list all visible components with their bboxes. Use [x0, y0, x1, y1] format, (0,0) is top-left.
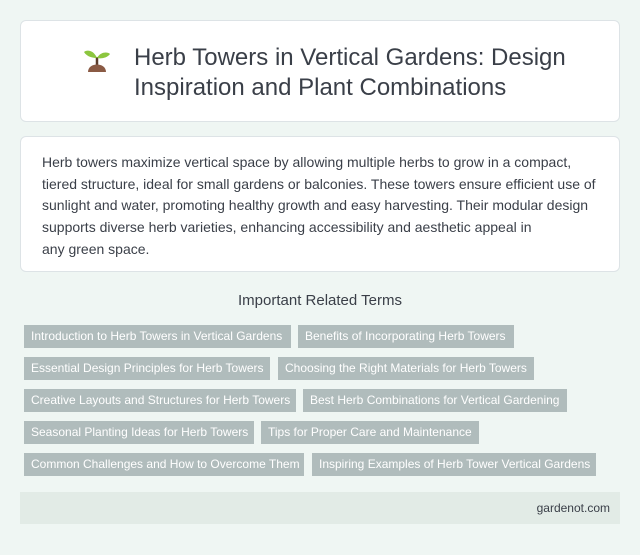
tags: Choosing the Right Materials for Herb Towers: [285, 361, 527, 375]
tags: Introduction to Herb Towers in Vertical Gardens: [31, 329, 282, 343]
tags: Essential Design Principles for Herb Towers: [31, 361, 264, 375]
description text: tiered structure, ideal for small gardens or balconies. These towers ensure efficient use of: [42, 176, 596, 192]
description card: [20, 136, 620, 272]
tags: Seasonal Planting Ideas for Herb Towers: [31, 425, 248, 439]
tags: Creative Layouts and Structures for Herb Towers: [31, 393, 290, 407]
tags: Tips for Proper Care and Maintenance: [268, 425, 472, 439]
icon: sprout: [84, 50, 110, 72]
description text: Herb towers maximize vertical space by allowing multiple herbs to grow in a compact,: [42, 154, 571, 170]
description text: any green space.: [42, 241, 149, 257]
heading: related terms: Important Related Terms: [238, 292, 402, 309]
footer text: gardenot.com: [537, 501, 610, 515]
title: Herb Towers in Vertical Gardens: Design Inspiration and Plant Combinations: [134, 44, 566, 101]
footer: [20, 492, 620, 524]
tags: Benefits of Incorporating Herb Towers: [305, 329, 506, 343]
description text: sunlight and water, promoting healthy growth and easy harvesting. Their modular design: [42, 197, 588, 213]
tags: Best Herb Combinations for Vertical Gardening: [310, 393, 559, 407]
tags: Inspiring Examples of Herb Tower Vertical Gardens: [319, 457, 590, 471]
tags: Common Challenges and How to Overcome Them: [31, 457, 300, 471]
description text: [42, 154, 596, 257]
title card: [20, 20, 620, 122]
description text: supports diverse herb varieties, enhancing accessibility and aesthetic appeal in: [42, 219, 532, 235]
